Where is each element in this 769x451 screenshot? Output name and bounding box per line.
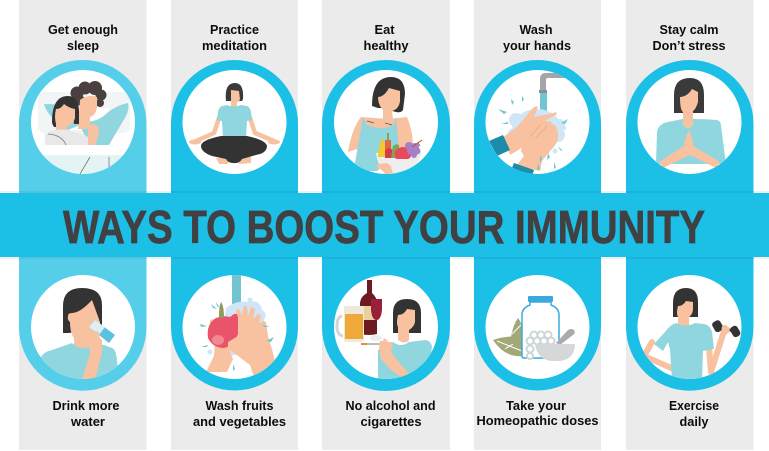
heading: exercise daily: Exercise [669,398,719,413]
icon: couple sleeping [36,81,130,174]
icon: washing apple [200,274,279,380]
heading: stay calm [652,22,726,53]
heading: wash fruits and vegetables [193,398,286,429]
heading: practice meditation: Practice [210,22,259,37]
panel: wash fruits and vegetables [171,255,298,450]
panel: take homeopathic doses [474,255,601,450]
heading: exercise daily: daily [680,414,709,429]
heading: wash fruits and vegetables: and vegetables [193,414,286,429]
heading: no alcohol and cigarettes [346,398,436,429]
panel: practice meditation [171,0,298,195]
panel: no alcohol and cigarettes [322,255,450,450]
heading: eat healthy: healthy [364,38,409,53]
icon: woman drinking water [40,288,119,382]
heading: drink more water [52,398,120,429]
icon: woman with fruit bowl [348,77,422,175]
heading: no alcohol and cigarettes: No alcohol and [346,398,436,413]
heading: take homeopathic doses: Take your [506,398,566,413]
heading: eat healthy: Eat [374,22,395,37]
panel: wash your hands [474,0,601,195]
icon: woman exercising with dumbbell [644,288,741,381]
heading: take homeopathic doses [476,398,598,428]
heading: drink more water: water [70,414,105,429]
heading: wash your hands: Wash [520,22,553,37]
heading: practice meditation [202,22,267,53]
heading: stay calm: Don’t stress [652,38,726,53]
heading: get enough sleep [48,22,118,53]
heading: wash your hands [503,22,571,53]
heading: wash fruits and vegetables: Wash fruits [206,398,274,413]
heading: stay calm: Stay calm [660,22,718,37]
panel: exercise daily [626,255,754,450]
heading: eat healthy [364,22,409,53]
icon: calm woman praying hands [656,78,726,168]
panel: get enough sleep [19,0,147,195]
icon: jar, leaves and mortar [493,296,575,361]
icon: washing hands under tap [489,73,568,176]
heading: take homeopathic doses: Homeopathic doses [476,413,598,428]
icon: woman meditating [189,83,280,164]
heading: get enough sleep: sleep [67,38,99,53]
heading: get enough sleep: Get enough [48,22,118,37]
heading: wash your hands: your hands [503,38,571,53]
icon: alcohol and cigarette refusal [337,280,432,381]
panel: eat healthy [322,0,450,195]
panel: stay calm [626,0,754,195]
heading: practice meditation: meditation [202,38,267,53]
panel: drink more water [19,255,147,450]
heading: no alcohol and cigarettes: cigarettes [360,414,422,429]
heading: exercise daily [669,398,719,429]
title banner [0,191,769,259]
heading: drink more water: Drink more [52,398,120,413]
